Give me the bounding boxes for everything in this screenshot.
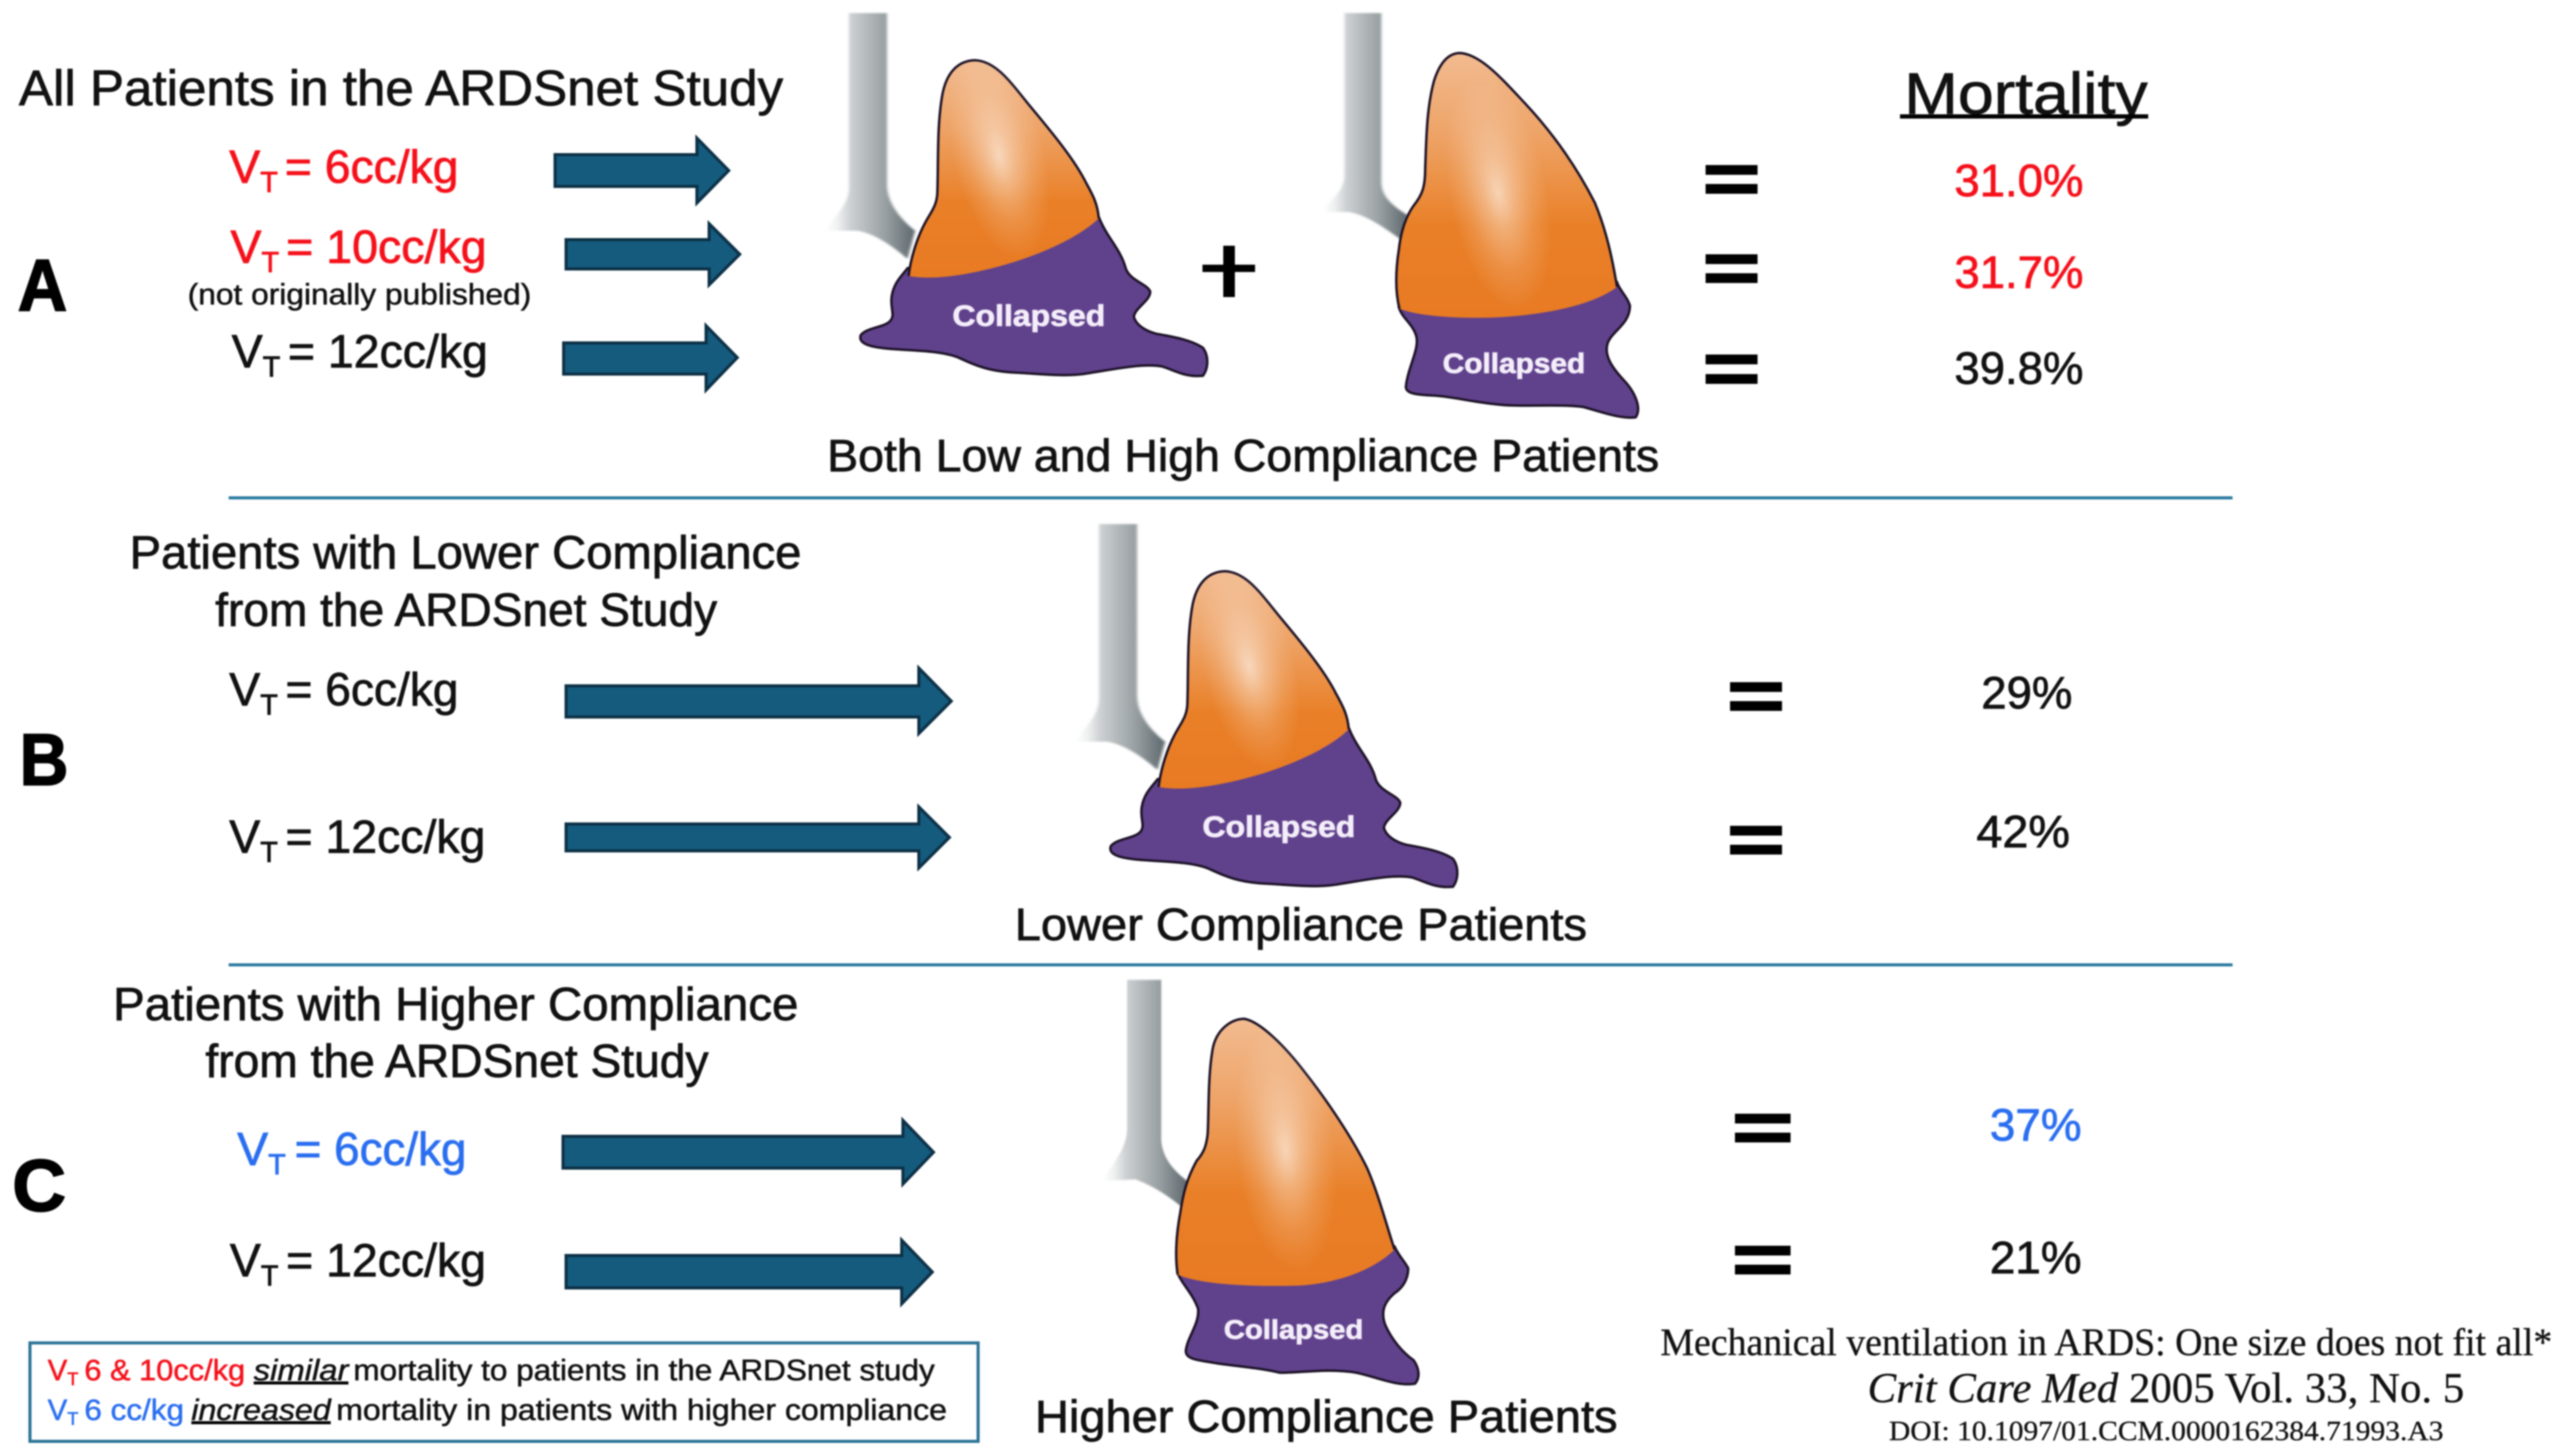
tidal volume label: 12cc/kg: T — [263, 350, 280, 383]
Mortality heading: Mortality — [1904, 61, 2148, 127]
lung: low compliance (section A) — [825, 13, 1207, 376]
citation: DOI: 10.1097/01.CCM.0000162384.71993.A3 — [1889, 1415, 2443, 1446]
tidal volume label: 6cc/kg red: T — [260, 166, 278, 198]
arrow A2 — [566, 224, 740, 285]
mortality 31.7%: 31.7% — [1954, 247, 2083, 298]
panel letter A: A — [18, 245, 67, 326]
summary callout box: T — [67, 1409, 78, 1429]
note: not originally published: (not originally published) — [188, 279, 531, 311]
citation: Mechanical ventilation in ARDS: One size does not fit all* — [1660, 1320, 2552, 1364]
equals C1 — [1735, 1114, 1791, 1142]
section B lung caption: Lower Compliance Patients — [1015, 899, 1587, 950]
citation: Crit Care Med 2005 Vol. 33, No. 5 — [1868, 1365, 2464, 1412]
section C heading: Patients with Higher Compliance — [113, 979, 798, 1031]
summary callout box: T — [67, 1369, 78, 1389]
tidal volume label: 12cc/kg: = 12cc/kg — [286, 1235, 486, 1287]
equals A2 — [1706, 254, 1758, 283]
mortality 29%: 29% — [1981, 667, 2072, 718]
summary callout box — [30, 1343, 978, 1441]
section C heading — [113, 979, 798, 1087]
lung: lower compliance (section B) — [1075, 524, 1457, 887]
summary callout box: similar — [254, 1355, 350, 1387]
tidal volume label: 12cc/kg: T — [261, 1259, 278, 1292]
label: Collapsed: Collapsed — [952, 300, 1105, 333]
tidal volume label: 10cc/kg red: V — [230, 221, 262, 273]
equals B1 — [1730, 682, 1782, 711]
panel letter C: C — [12, 1145, 66, 1227]
tidal volume label: 12cc/kg: T — [260, 836, 278, 868]
mortality 37%: 37% — [1990, 1100, 2082, 1150]
arrow B2 — [566, 807, 949, 868]
tidal volume label: 6cc/kg blue: = 6cc/kg — [295, 1123, 466, 1175]
arrow A3 — [564, 326, 737, 390]
section B heading — [130, 527, 801, 636]
summary callout box: mortality in patients with higher compliance — [336, 1394, 947, 1427]
summary callout box: increased — [191, 1394, 331, 1427]
section A heading: All Patients in the ARDSnet Study — [19, 61, 783, 116]
label: Collapsed: Collapsed — [1443, 348, 1585, 379]
section C lung caption: Higher Compliance Patients — [1035, 1391, 1618, 1442]
tidal volume label: 12cc/kg: V — [230, 1235, 261, 1287]
divider BC — [229, 963, 2233, 966]
equals C2 — [1735, 1246, 1791, 1274]
arrow C2 — [566, 1240, 932, 1304]
plus sign — [1202, 246, 1255, 297]
arrow C1 — [563, 1120, 933, 1184]
summary callout box: V — [48, 1394, 67, 1427]
summary callout box: 6 cc/kg — [84, 1394, 184, 1427]
citation — [1660, 1320, 2552, 1446]
summary callout box: mortality to patients in the ARDSnet study — [353, 1355, 935, 1387]
mortality 21%: 21% — [1990, 1232, 2082, 1283]
arrow B1 — [566, 668, 951, 734]
label: Collapsed: Collapsed — [1224, 1315, 1363, 1345]
mortality 31.0%: 31.0% — [1954, 155, 2083, 206]
mortality 39.8%: 39.8% — [1954, 343, 2083, 394]
label: Collapsed: Collapsed — [1202, 811, 1355, 844]
panel letter B: B — [20, 719, 68, 801]
lung: higher compliance (section C) — [1103, 980, 1418, 1384]
tidal volume label: 6cc/kg red: = 6cc/kg — [285, 141, 458, 193]
tidal volume label: 6cc/kg: V — [229, 664, 260, 716]
tidal volume label: 10cc/kg red: = 10cc/kg — [286, 221, 487, 273]
section A lung caption: Both Low and High Compliance Patients — [827, 430, 1659, 481]
tidal volume label: 6cc/kg blue: V — [237, 1123, 268, 1175]
tidal volume label: 12cc/kg: V — [229, 811, 260, 863]
equals A1 — [1706, 165, 1758, 194]
summary callout box: V — [48, 1355, 67, 1387]
tidal volume label: 12cc/kg: = 12cc/kg — [288, 326, 488, 378]
divider AB — [229, 496, 2233, 499]
tidal volume label: 12cc/kg: = 12cc/kg — [285, 811, 485, 863]
tidal volume label: 6cc/kg: T — [260, 688, 278, 721]
summary callout box: 6 & 10cc/kg — [84, 1355, 245, 1387]
tidal volume label: 6cc/kg blue: T — [268, 1148, 285, 1180]
section B heading: from the ARDSnet Study — [215, 584, 717, 636]
section B heading: Patients with Lower Compliance — [130, 527, 801, 579]
tidal volume label: 6cc/kg: = 6cc/kg — [285, 664, 458, 716]
equals A3 — [1706, 355, 1758, 384]
tidal volume label: 10cc/kg red: T — [262, 246, 279, 278]
section C heading: from the ARDSnet Study — [205, 1035, 709, 1087]
tidal volume label: 12cc/kg: V — [232, 326, 263, 378]
tidal volume label: 6cc/kg red: V — [229, 141, 260, 193]
arrow A1 — [555, 138, 729, 203]
mortality 42%: 42% — [1976, 806, 2070, 857]
equals B2 — [1730, 826, 1782, 855]
lung: high compliance (section A) — [1323, 13, 1638, 417]
